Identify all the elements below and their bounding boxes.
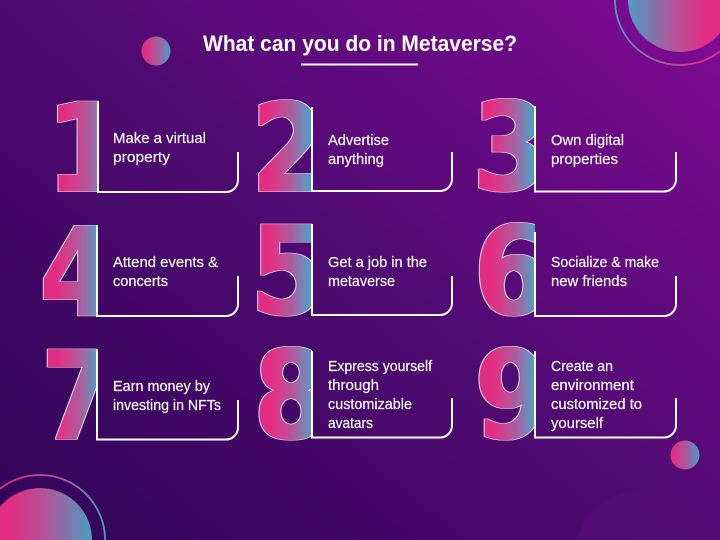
- panel: item 5: [257, 224, 453, 316]
- label 3: Own digital: [551, 133, 624, 149]
- label 8: through: [328, 378, 379, 394]
- numeral 9: 9: [475, 325, 549, 467]
- label 9: Create an: [551, 359, 613, 375]
- frame 2: [312, 107, 452, 191]
- label 2: Advertise: [328, 133, 389, 149]
- label 4: Attend events &: [113, 255, 218, 271]
- frame 7: [97, 349, 238, 440]
- panel: item 4: [42, 225, 239, 317]
- label 3: properties: [551, 152, 618, 168]
- frame 6: [535, 232, 676, 316]
- label 6: Socialize & make: [551, 255, 659, 271]
- label 8: Express yourself: [328, 359, 433, 375]
- numeral 7: 7: [42, 326, 112, 468]
- frame 1: [98, 101, 238, 192]
- decorative blob: bottom right: [578, 487, 720, 540]
- numeral 1: 1: [46, 78, 126, 220]
- decorative circle: top right: [615, 0, 720, 65]
- panel: item 2: [258, 99, 453, 192]
- label 2: anything: [328, 152, 384, 168]
- panel: item 1: [56, 100, 239, 193]
- numeral 8: 8: [254, 325, 328, 467]
- label 6: new friends: [551, 274, 627, 290]
- title: What can you do in Metaverse?: [203, 31, 517, 56]
- frame 4: [97, 225, 238, 316]
- numeral 3: 3: [473, 77, 547, 219]
- frame 5: [312, 224, 452, 315]
- decorative dot: beside title: [142, 36, 170, 66]
- label 7: investing in NFTs: [113, 398, 221, 414]
- panel: item 8: [258, 346, 453, 440]
- decorative dot: lower right: [670, 440, 700, 470]
- numeral 2: 2: [252, 78, 324, 220]
- label 4: concerts: [113, 274, 168, 290]
- title underline: [301, 64, 418, 66]
- panel: item 9: [478, 346, 677, 440]
- label 8: avatars: [328, 416, 373, 432]
- label 7: Earn money by: [113, 379, 211, 395]
- numeral 6: 6: [474, 201, 550, 343]
- label 5: Get a job in the: [328, 255, 427, 271]
- decorative circle: bottom left: [0, 475, 105, 540]
- label 9: yourself: [551, 416, 604, 432]
- label 5: metaverse: [328, 274, 395, 290]
- frame 8: [312, 351, 452, 438]
- frame 3: [535, 106, 676, 192]
- label 9: environment: [551, 378, 634, 394]
- label 8: customizable: [328, 397, 412, 413]
- panel: item 6: [478, 222, 677, 317]
- frame 9: [535, 351, 676, 438]
- panel: item 3: [478, 98, 677, 192]
- label 1: property: [113, 150, 171, 166]
- label 1: Make a virtual: [113, 131, 206, 147]
- numeral 4: 4: [40, 202, 114, 344]
- label 9: customized to: [551, 397, 642, 413]
- numeral 5: 5: [251, 201, 325, 343]
- panel: item 7: [46, 348, 239, 440]
